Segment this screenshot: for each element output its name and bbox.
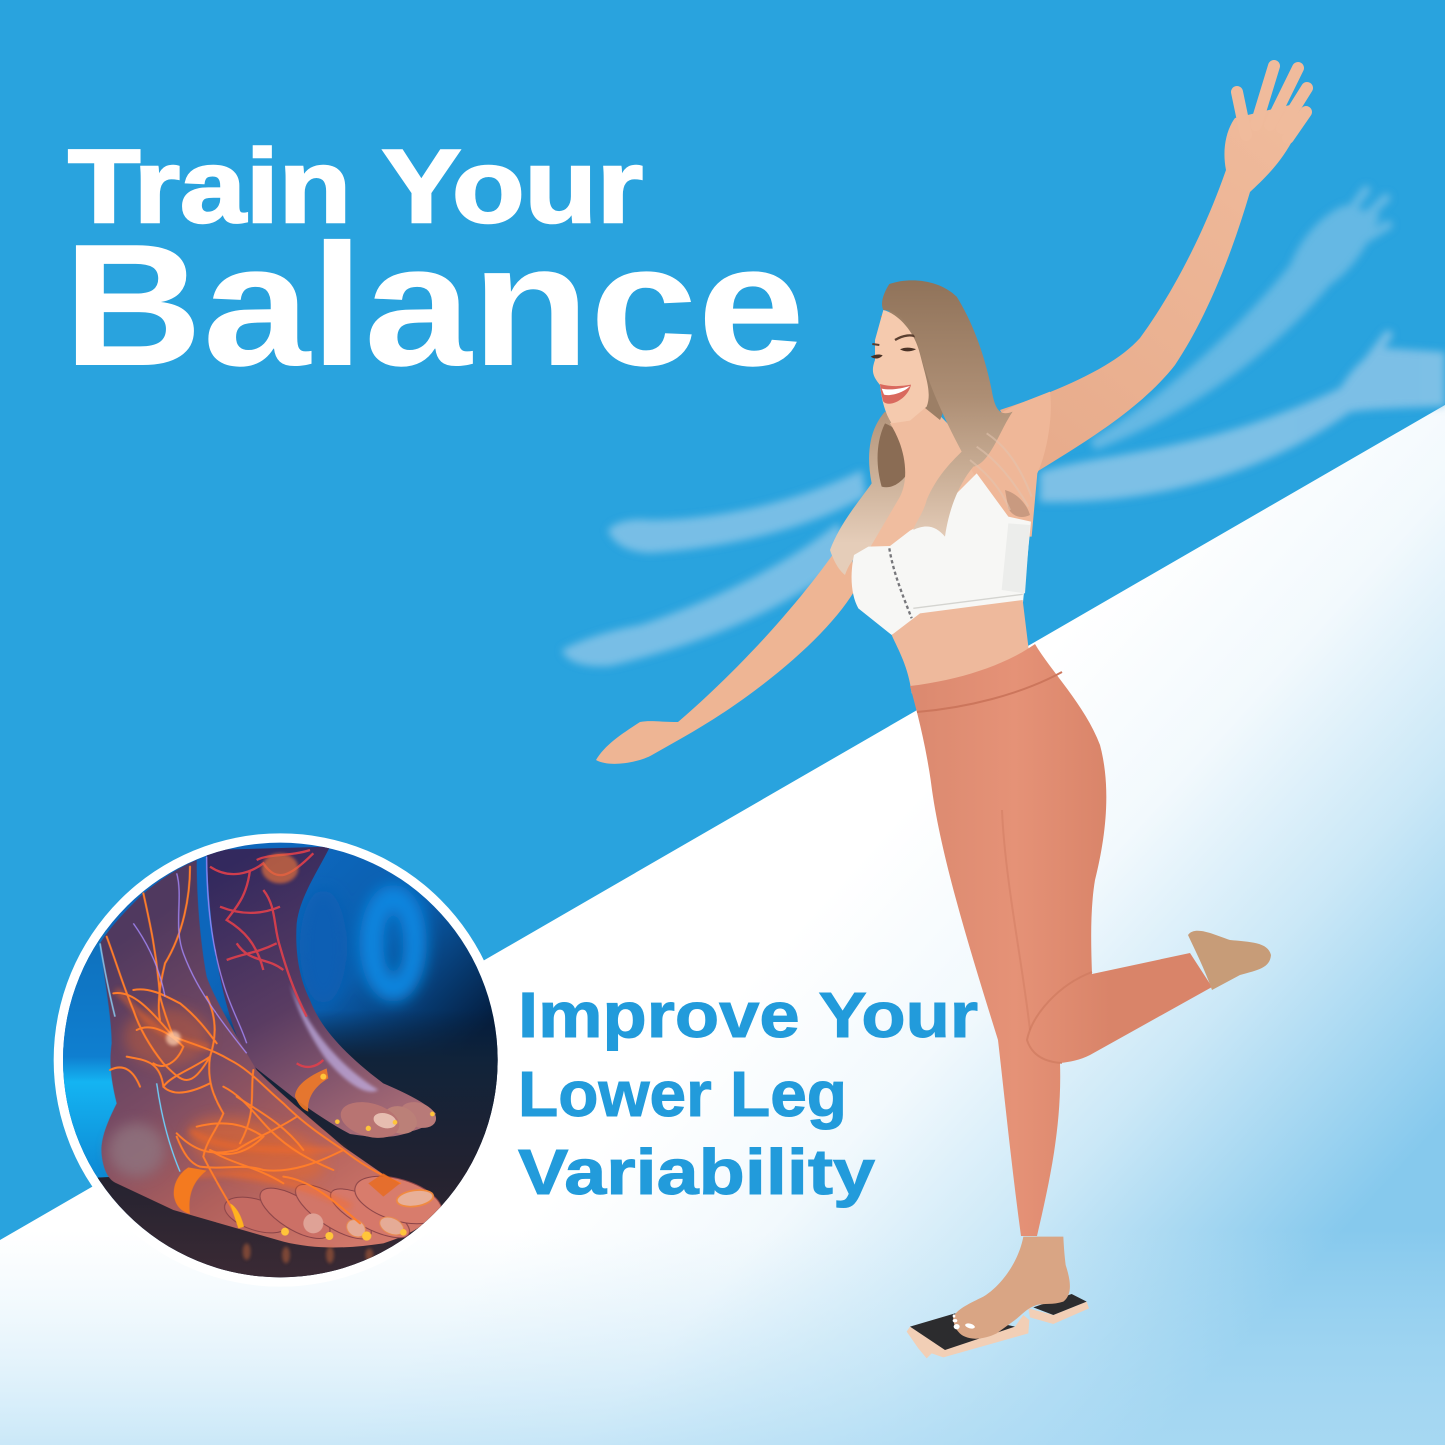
fingers bbox=[1237, 66, 1307, 138]
back leg veins bbox=[210, 850, 323, 1067]
third toe bbox=[294, 1184, 372, 1240]
big toe bbox=[354, 1176, 442, 1224]
title bbox=[63, 129, 805, 402]
knee shading bbox=[1027, 972, 1092, 1063]
white ring bbox=[54, 833, 507, 1287]
dark blue backdrop bbox=[63, 842, 498, 1278]
ghost arms: motion trail bbox=[562, 190, 1445, 666]
subtitle line: Variability: Variability bbox=[518, 1136, 875, 1208]
neck and chest bbox=[867, 400, 1017, 560]
leggings bbox=[910, 644, 1212, 1236]
inner leg shading bbox=[1002, 810, 1030, 1030]
toenails bbox=[953, 1314, 975, 1330]
balance board and standing foot bbox=[907, 1237, 1089, 1358]
fourth toe bbox=[259, 1188, 331, 1239]
lower left ghost arm bbox=[562, 523, 852, 666]
dark floor bbox=[98, 1013, 498, 1278]
raised arm with hand bbox=[1000, 66, 1307, 473]
back leg orange cloud bbox=[262, 853, 298, 883]
small board plate bbox=[1028, 1294, 1089, 1324]
face bbox=[873, 310, 929, 423]
floor reflections bbox=[243, 1243, 373, 1263]
top bbox=[852, 473, 1031, 635]
toes bbox=[224, 1176, 442, 1240]
left hair mass bbox=[830, 412, 920, 575]
standing foot bbox=[953, 1237, 1070, 1339]
circular foot image bbox=[50, 830, 517, 1297]
hair wisps over shoulder bbox=[970, 433, 1032, 510]
front hair bbox=[882, 280, 1013, 537]
nerve star bbox=[166, 1031, 181, 1046]
bright vein flare bbox=[230, 1203, 244, 1228]
lower right ghost arm bbox=[1040, 335, 1445, 502]
hair base behind face edge bbox=[880, 307, 948, 420]
upper right ghost arm bbox=[1090, 190, 1388, 450]
toe-side orange band bbox=[368, 1173, 400, 1197]
dark under-hair bbox=[878, 423, 912, 487]
large board plate bbox=[907, 1313, 1029, 1358]
eyebrows and eyes bbox=[871, 335, 917, 359]
raised foot bbox=[1188, 931, 1271, 990]
top hem line bbox=[913, 594, 1023, 608]
heel pale highlight bbox=[108, 1123, 165, 1177]
top closure bbox=[889, 548, 912, 618]
waistband line bbox=[917, 672, 1062, 712]
diagonal light floor panel bbox=[0, 405, 1445, 1445]
upper left ghost arm bbox=[608, 470, 866, 553]
orange veins bbox=[107, 867, 400, 1227]
subtitle line: Improve Your: Improve Your bbox=[518, 979, 978, 1051]
front foot orange band bbox=[174, 1167, 207, 1214]
fifth toe bbox=[224, 1196, 288, 1234]
back leg and foot bbox=[207, 847, 436, 1137]
top side panel bbox=[1002, 523, 1030, 593]
woman figure bbox=[596, 66, 1307, 1358]
subtitle bbox=[518, 979, 978, 1208]
armpit shadow bbox=[1005, 490, 1030, 517]
back foot toes bbox=[340, 1102, 436, 1138]
violet veins bbox=[133, 857, 247, 1053]
subtitle line: Lower Leg: Lower Leg bbox=[518, 1058, 847, 1130]
midfoot orange glow bbox=[184, 1111, 328, 1186]
title line: Balance: Balance bbox=[63, 207, 805, 402]
glowing toe tips bbox=[281, 1074, 435, 1241]
back foot orange band bbox=[295, 1068, 328, 1112]
toenails bbox=[303, 1189, 434, 1238]
title line: Train Your: Train Your bbox=[68, 129, 643, 245]
second toe bbox=[330, 1188, 410, 1238]
torso traced in upper-body coordinates bbox=[830, 280, 1051, 693]
shoulder bbox=[957, 392, 1051, 537]
left cyan floor bbox=[63, 930, 117, 1184]
glow under veins bbox=[117, 990, 350, 1207]
cyan sparks bbox=[157, 1083, 180, 1172]
blurred roller bbox=[352, 878, 436, 1010]
back foot pale glow bbox=[290, 983, 378, 1092]
smile bbox=[880, 384, 911, 404]
cyan edge light bbox=[100, 943, 115, 1017]
front leg and foot bbox=[100, 860, 441, 1247]
ankle orange glow bbox=[123, 1007, 210, 1067]
lowered arm with hand bbox=[596, 530, 855, 764]
midriff bbox=[892, 600, 1030, 693]
